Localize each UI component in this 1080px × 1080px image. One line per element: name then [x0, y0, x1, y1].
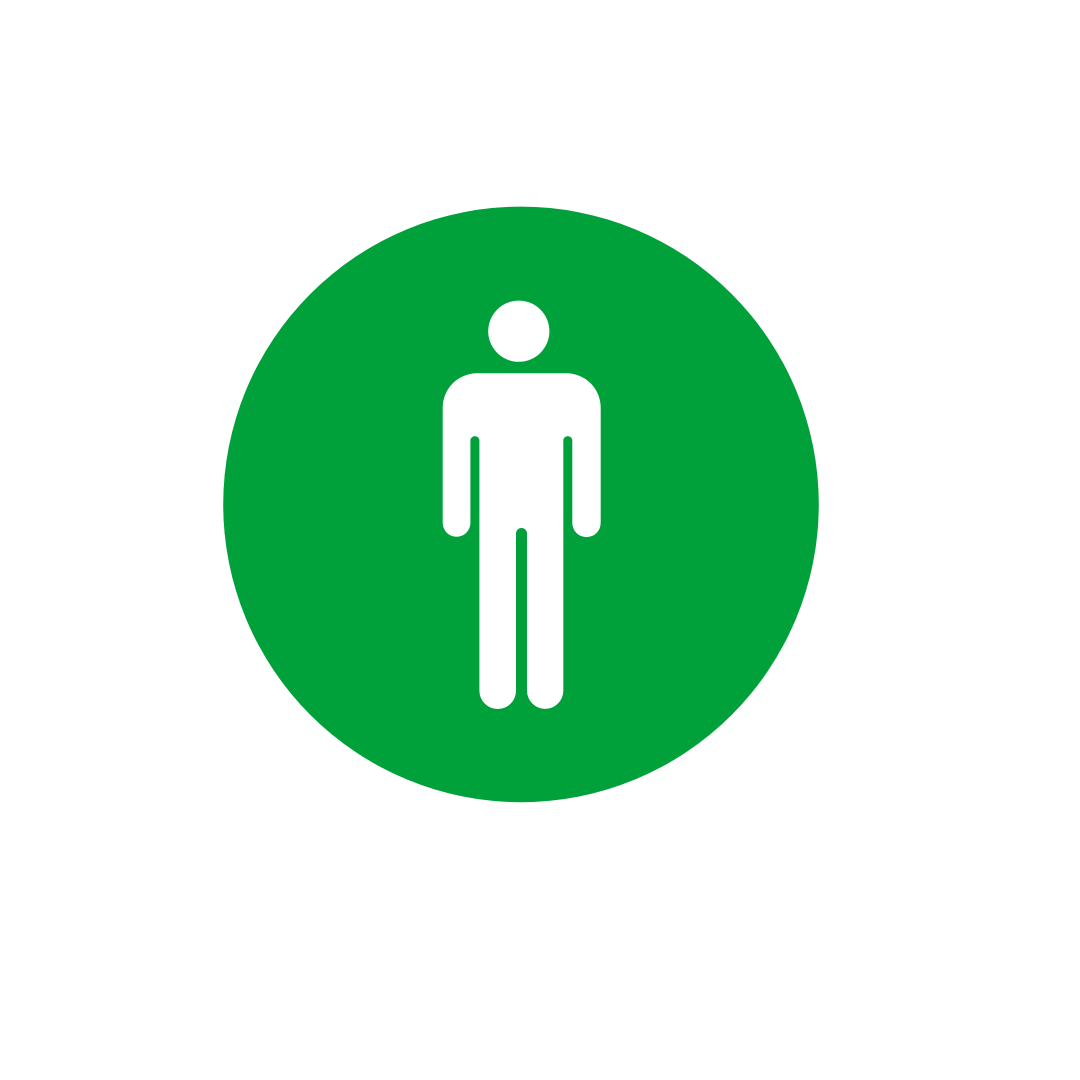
head — [488, 301, 549, 362]
green circle — [223, 207, 819, 802]
body — [443, 373, 601, 709]
person figure — [443, 301, 601, 709]
